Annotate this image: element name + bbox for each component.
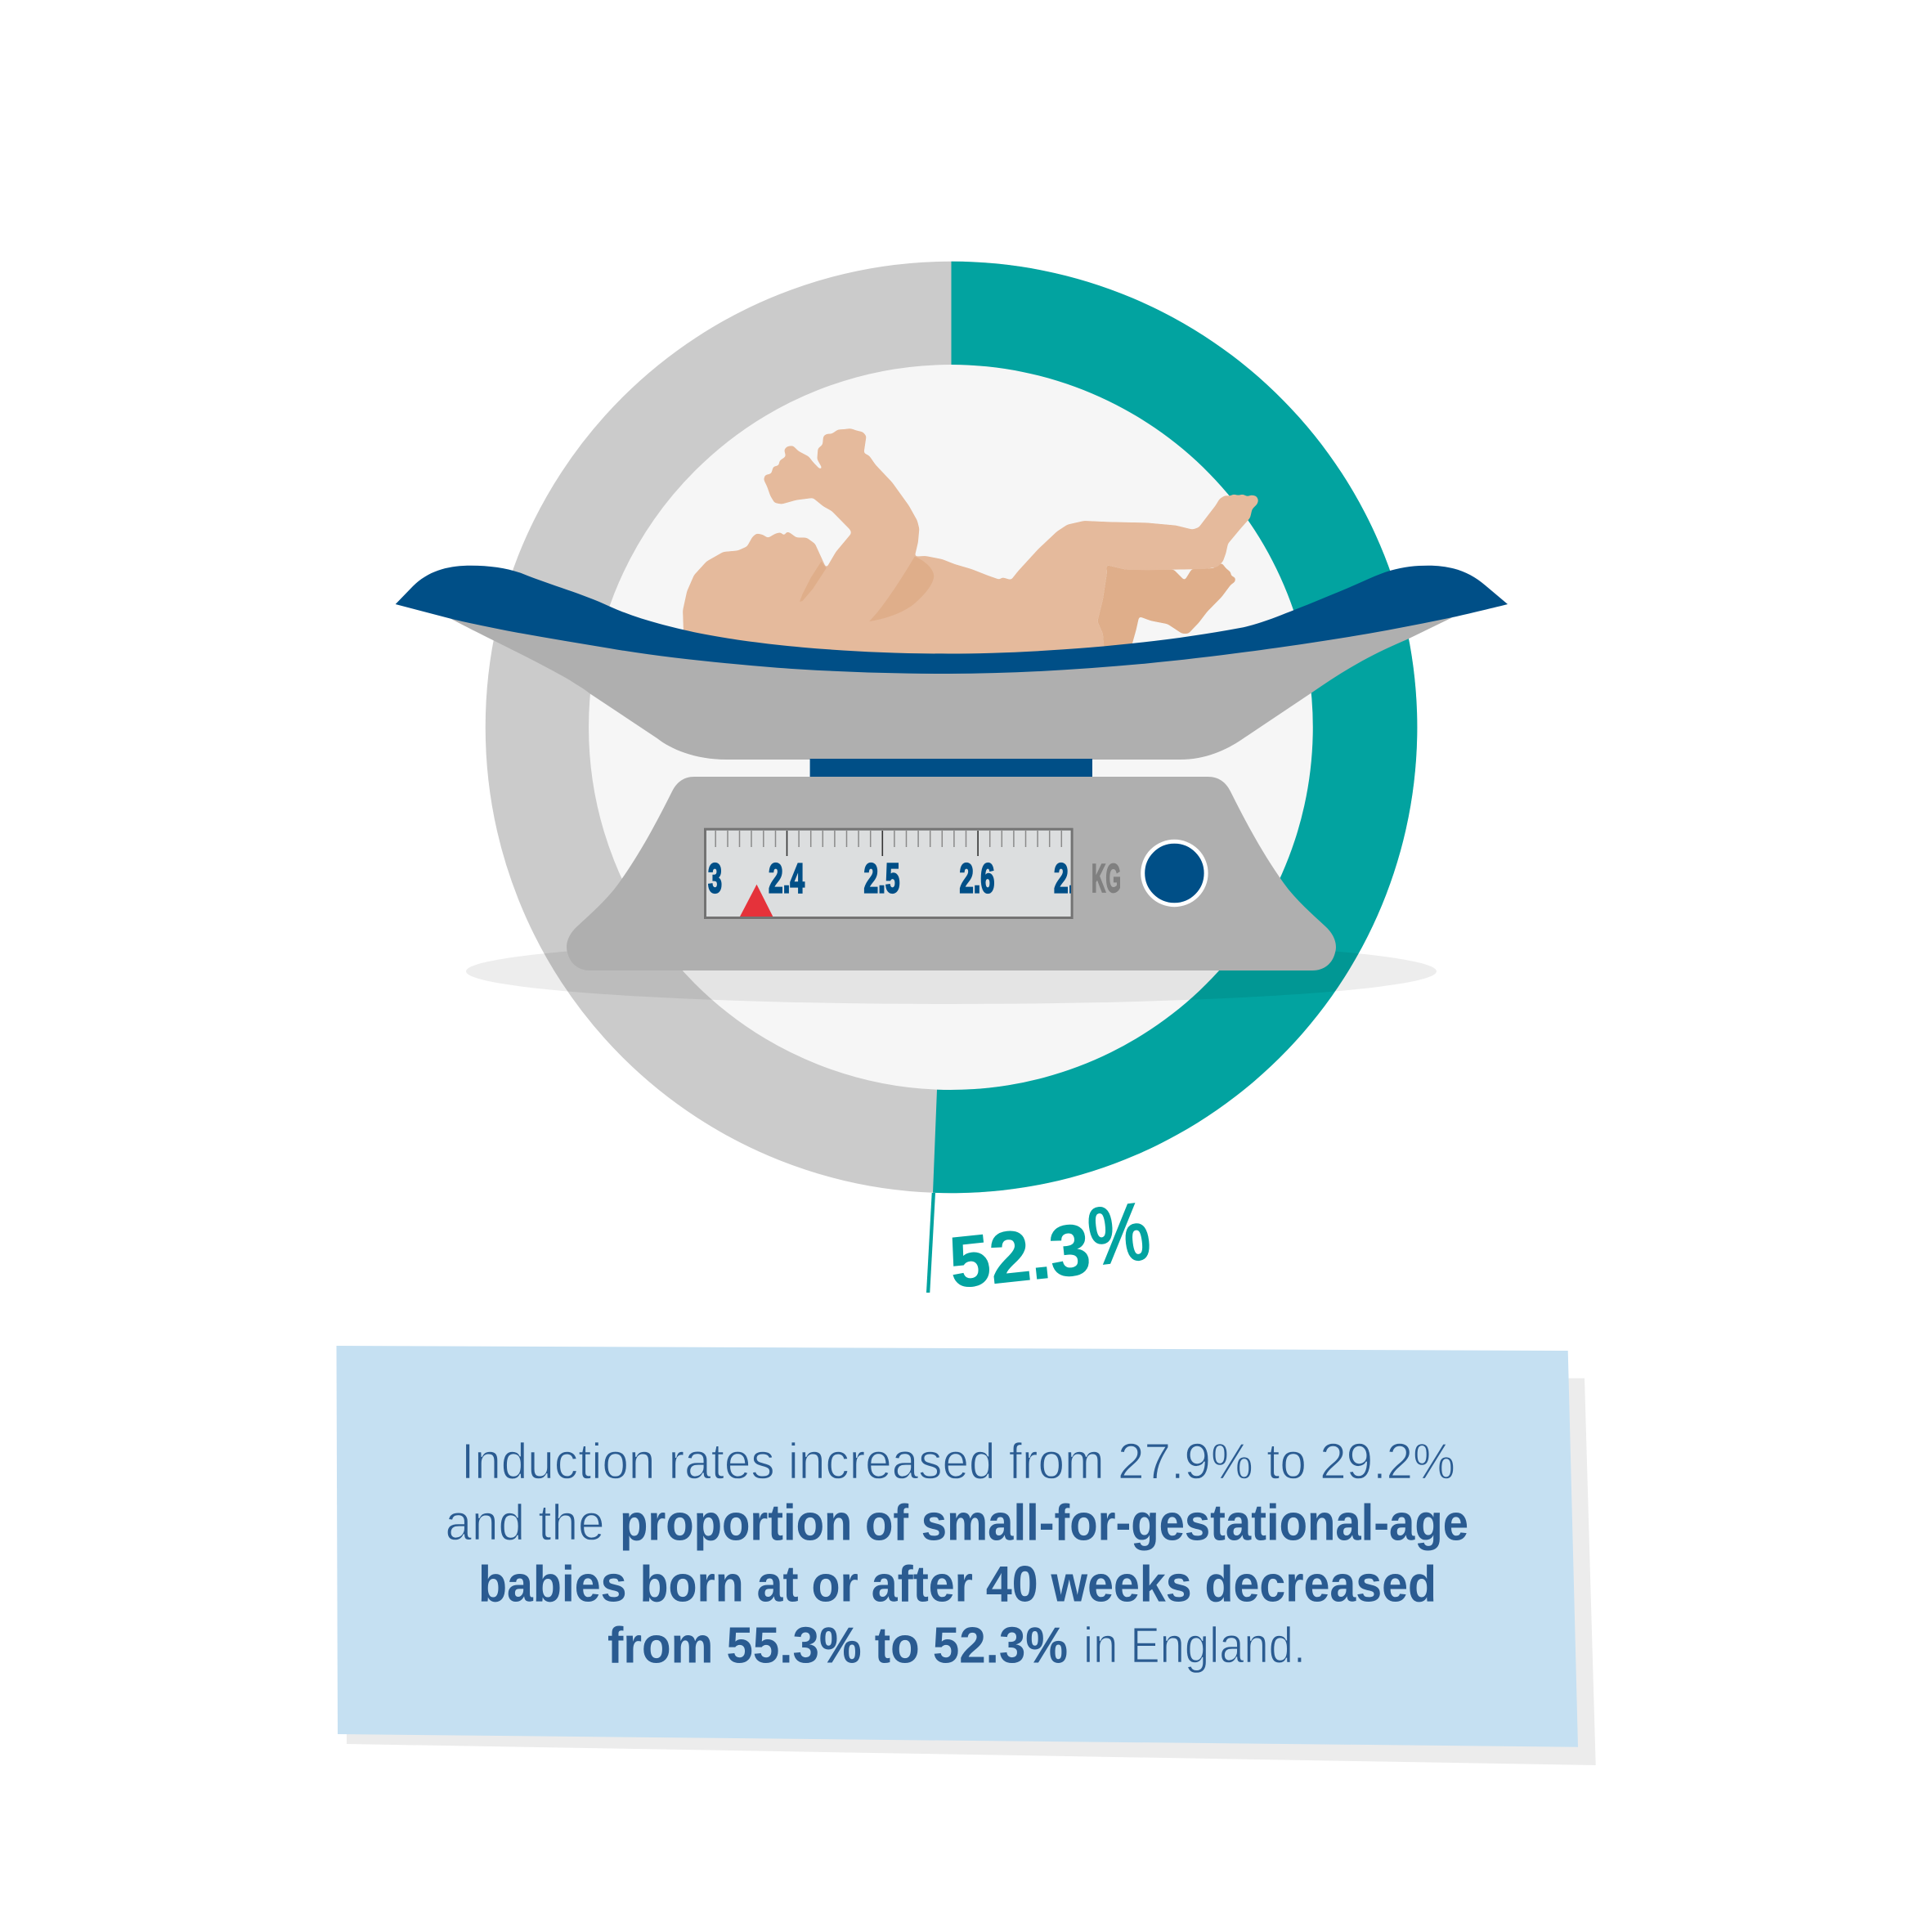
baby body bbox=[683, 428, 1258, 658]
dial numbers: 2.7 bbox=[1054, 855, 1090, 901]
caption text: and the bbox=[445, 1495, 605, 1551]
percentage marker line bbox=[926, 1193, 935, 1293]
navy mat on bowl bbox=[396, 566, 1508, 674]
dial numbers: 3 bbox=[708, 855, 722, 901]
dial pointer bbox=[740, 885, 773, 917]
dial numbers: 2.6 bbox=[960, 855, 994, 901]
dial numbers bbox=[708, 862, 1071, 894]
weight dial bbox=[705, 829, 1090, 917]
ring: remainder segment bbox=[537, 313, 1365, 1141]
dial ticks bbox=[715, 831, 1061, 847]
caption box bbox=[337, 1346, 1578, 1747]
caption box shadow bbox=[347, 1378, 1596, 1765]
scale post bbox=[810, 759, 1092, 778]
base body bbox=[567, 777, 1336, 970]
caption text bbox=[445, 1433, 1468, 1674]
caption text: in England. bbox=[1083, 1617, 1306, 1674]
donut chart: 52.3% bbox=[537, 262, 1417, 1193]
scale base bbox=[567, 777, 1336, 970]
baby armpit shadow bbox=[800, 562, 827, 602]
baby bbox=[683, 428, 1258, 658]
scale bowl bbox=[451, 617, 1453, 760]
percentage label: % bbox=[1083, 1186, 1154, 1282]
baby far leg bbox=[1097, 563, 1235, 658]
percentage label: 52.3 bbox=[946, 1208, 1094, 1303]
inner disc bbox=[587, 363, 1315, 1091]
navy knob bbox=[1143, 841, 1206, 905]
dial major ticks bbox=[787, 831, 978, 856]
infographic canvas bbox=[337, 262, 1596, 1765]
percentage label bbox=[946, 1186, 1154, 1303]
scale floor shadow bbox=[466, 939, 1437, 1004]
caption text: babies born at or after 40 weeks decreased bbox=[478, 1556, 1437, 1612]
caption text: proportion of small-for-gestational-age bbox=[620, 1495, 1468, 1551]
caption text: from 55.3% to 52.3% bbox=[607, 1617, 1068, 1674]
ring: 52.3% segment bbox=[933, 262, 1417, 1193]
caption text: Induction rates increased from 27.9% to 29.2% bbox=[461, 1433, 1455, 1490]
dial numbers: 2.5 bbox=[863, 855, 899, 901]
baby belly shadow bbox=[869, 557, 934, 621]
dial numbers: 2.4 bbox=[769, 855, 805, 901]
scale base: KG bbox=[1092, 857, 1121, 901]
